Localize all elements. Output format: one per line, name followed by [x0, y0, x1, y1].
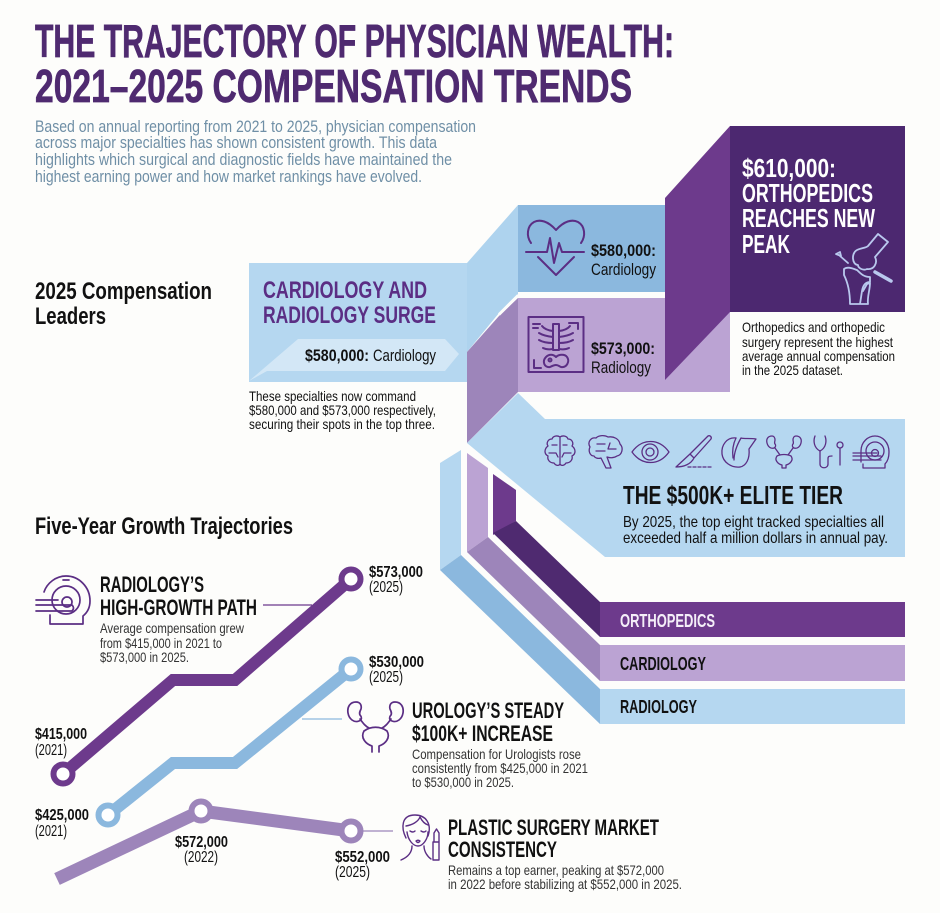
callout: radiology: $573,000 in 2025.	[100, 649, 189, 665]
surge description: These specialties now command	[249, 388, 416, 404]
icon: scalpel	[676, 436, 711, 467]
panel: elite tier	[467, 393, 905, 557]
line: radiology trajectory	[54, 570, 360, 784]
title: 2021–2025 COMPENSATION TRENDS	[35, 60, 632, 112]
chevron: cardiology figure: $580,000:	[305, 346, 369, 365]
callout: radiology: Average compensation grew	[100, 620, 245, 636]
ribbon: cardiology bar: CARDIOLOGY	[620, 654, 706, 674]
ribbon: orthopedics bar	[493, 474, 905, 637]
heading: 2025 compensation leaders: 2025 Compensation	[35, 278, 212, 305]
ribbon: radiology bar: RADIOLOGY	[620, 697, 697, 717]
panel: radiology step: $573,000:	[591, 339, 655, 358]
panel: elite tier: THE $500K+ ELITE TIER	[623, 480, 843, 510]
icon: brain front	[545, 436, 575, 465]
data labels: (2025)	[369, 579, 403, 596]
chevron: cardiology figure: Cardiology	[373, 346, 436, 365]
panel: cardiology and radiology surge	[249, 263, 467, 382]
callout: urology: $100K+ INCREASE	[412, 721, 553, 746]
icon: kidneys and bladder	[348, 702, 403, 752]
icon: brain side	[589, 436, 622, 468]
callout: radiology: RADIOLOGY’S	[100, 572, 204, 597]
line: plastic surgery trajectory	[57, 802, 393, 879]
icon: knee joint	[836, 234, 891, 304]
data labels	[35, 564, 424, 881]
data labels: $572,000	[175, 834, 228, 851]
intro text: across major specialties has shown consistent growth. This data	[35, 134, 438, 152]
data labels: (2025)	[335, 864, 370, 881]
callout: plastic surgery: PLASTIC SURGERY MARKET	[448, 815, 659, 840]
panel: orthopedics peak: REACHES NEW	[742, 203, 875, 233]
orthopedics description: Orthopedics and orthopedic	[742, 319, 885, 335]
callout: radiology	[36, 572, 257, 665]
chevron: cardiology figure	[249, 339, 459, 381]
fold: blue ribbon	[467, 205, 518, 352]
orthopedics description: average annual compensation	[742, 348, 895, 364]
intro text: highest earning power and how market rankings have evolved.	[35, 168, 422, 186]
panel: elite tier: exceeded half a million dollars in annual pay.	[623, 530, 888, 547]
callout: urology: UROLOGY’S STEADY	[412, 698, 564, 723]
icon: face and lipstick	[401, 815, 439, 860]
icon: chest x-ray	[528, 317, 584, 372]
callout: urology: Compensation for Urologists rose	[412, 746, 581, 762]
panel: cardiology step: Cardiology	[591, 260, 656, 279]
panel: cardiology and radiology surge: RADIOLOGY SURGE	[263, 302, 436, 329]
callout: urology	[348, 698, 588, 790]
panel: orthopedics peak: $610,000:	[742, 153, 836, 183]
panel: orthopedics peak: ORTHOPEDICS	[742, 178, 873, 208]
surge description: securing their spots in the top three.	[249, 416, 435, 432]
panel: orthopedics peak	[665, 126, 905, 380]
callout: plastic surgery: Remains a top earner, peaking at $572,000	[448, 862, 664, 878]
panel: cardiology step: $580,000:	[591, 241, 656, 260]
icon: liver organ	[722, 438, 756, 467]
heading: 2025 compensation leaders: Leaders	[35, 303, 106, 330]
icon: eye	[632, 442, 669, 462]
heading: five-year growth: Five-Year Growth Trajectories	[35, 513, 293, 540]
callout: plastic surgery: CONSISTENCY	[448, 837, 557, 862]
icon: MRI scanner	[853, 436, 889, 468]
ribbon: radiology bar	[440, 450, 905, 724]
orthopedics description	[742, 319, 895, 378]
intro text: highlights which surgical and diagnostic fields have maintained the	[35, 151, 452, 169]
panel: cardiology and radiology surge: CARDIOLOGY AND	[263, 277, 427, 304]
panel: cardiology step	[518, 205, 665, 292]
data labels: $530,000	[369, 654, 424, 671]
icon: stethoscope	[814, 436, 843, 468]
data labels: (2021)	[35, 823, 67, 840]
data labels: $573,000	[369, 564, 423, 581]
data labels: (2025)	[369, 669, 403, 686]
panel: radiology step	[467, 296, 730, 443]
panel: orthopedics peak: PEAK	[742, 229, 790, 259]
icon row: specialties	[545, 436, 889, 468]
data labels: (2021)	[35, 742, 67, 759]
line: urology trajectory	[98, 660, 360, 824]
data labels: $552,000	[335, 849, 390, 866]
panel: radiology step: Radiology	[591, 358, 651, 377]
callout: plastic surgery	[401, 815, 682, 892]
callout: urology: to $530,000 in 2025.	[412, 774, 514, 790]
callout: radiology: from $415,000 in 2021 to	[100, 635, 222, 651]
intro text	[35, 118, 476, 186]
orthopedics description: in the 2025 dataset.	[742, 362, 843, 378]
title	[35, 15, 674, 112]
callout: plastic surgery: in 2022 before stabilizing at $552,000 in 2025.	[448, 876, 682, 892]
callout: radiology: HIGH-GROWTH PATH	[100, 595, 257, 620]
surge description	[249, 388, 436, 432]
surge description: $580,000 and $573,000 respectively,	[249, 402, 436, 418]
data labels: (2022)	[184, 849, 218, 866]
orthopedics description: surgery represent the highest	[742, 334, 893, 350]
data labels: $415,000	[35, 726, 87, 743]
icon: MRI scanner	[36, 576, 90, 624]
ribbon: cardiology bar	[467, 453, 905, 681]
data labels: $425,000	[35, 807, 89, 824]
callout: urology: consistently from $425,000 in 2021	[412, 760, 588, 776]
intro text: Based on annual reporting from 2021 to 2025, physician compensation	[35, 118, 476, 136]
ribbon: orthopedics bar: ORTHOPEDICS	[620, 611, 715, 631]
panel: elite tier: By 2025, the top eight tracked specialties all	[623, 514, 884, 531]
heading: 2025 compensation leaders	[35, 278, 212, 330]
icon: heart with pulse	[526, 221, 584, 275]
icon: kidneys and bladder	[767, 436, 801, 468]
